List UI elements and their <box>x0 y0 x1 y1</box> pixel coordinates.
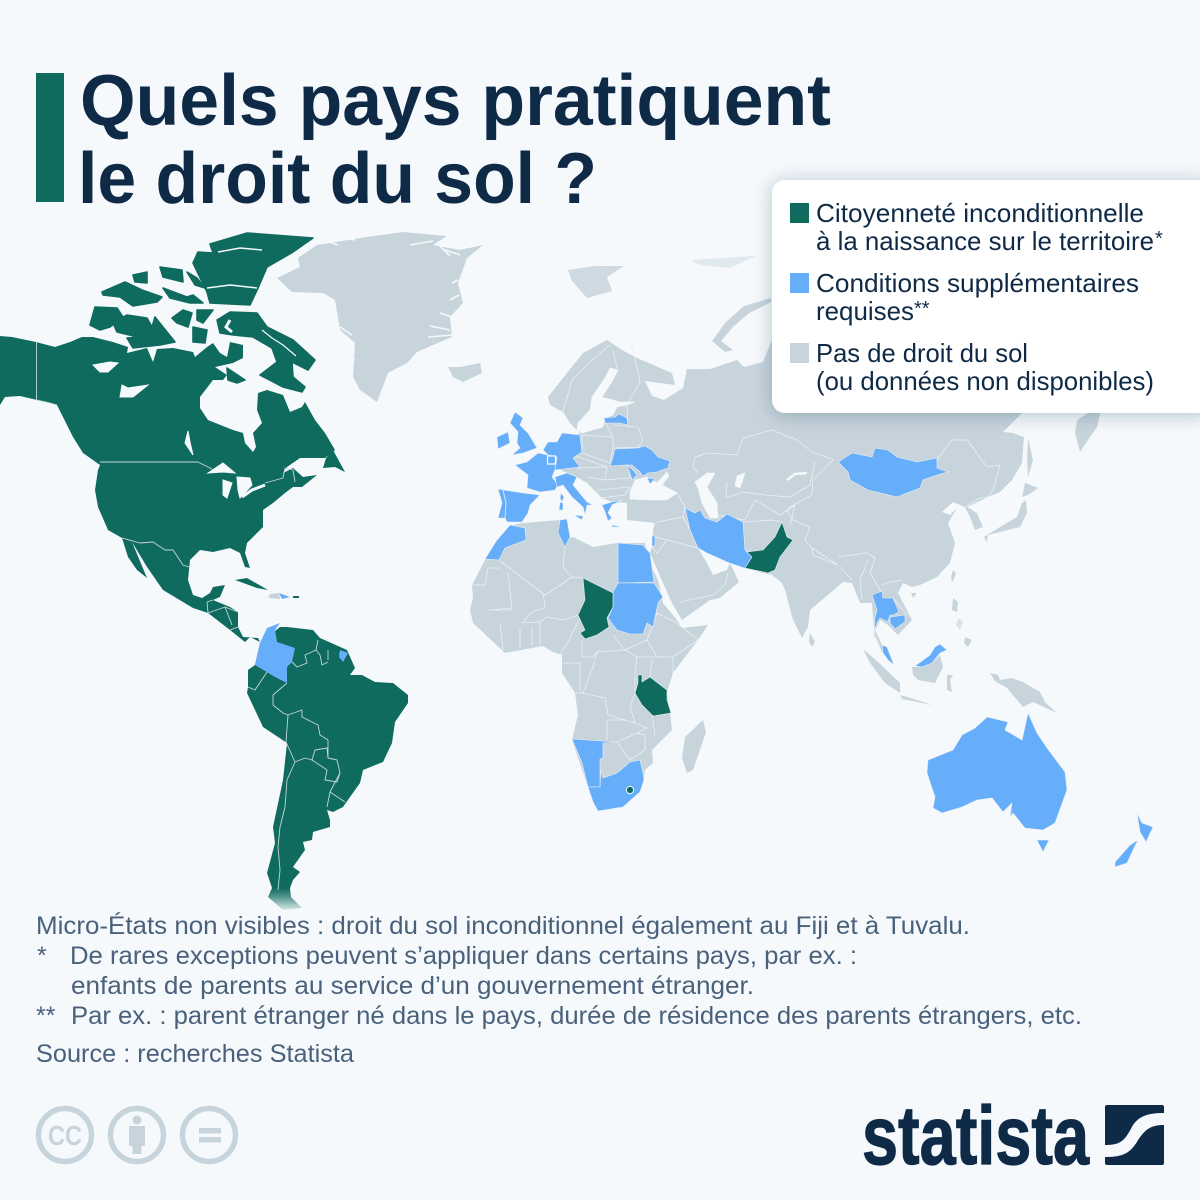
Colombia and French Guiana <box>255 623 348 683</box>
Ireland <box>497 432 510 449</box>
Lesotho <box>626 786 634 794</box>
Mediterranean islands <box>574 515 583 520</box>
inland seas <box>577 368 807 518</box>
Crimea <box>647 478 655 484</box>
legend: unconditional citizenship: * <box>1155 228 1163 250</box>
footnotes <box>36 911 1082 1030</box>
Tanzania <box>635 675 671 716</box>
Malaysia <box>882 645 894 665</box>
Portugal border <box>503 490 506 518</box>
Arctic archipelago <box>90 233 315 392</box>
title: Quels pays pratiquent <box>80 61 831 141</box>
Germany, Netherlands <box>543 433 582 470</box>
footnotes: De rares exceptions peuvent s’appliquer dans certains pays, par ex. : <box>70 942 857 970</box>
United Kingdom <box>510 412 537 455</box>
Statista logo icon <box>1105 1105 1164 1165</box>
world map <box>0 232 1153 910</box>
Israel <box>652 536 655 547</box>
legend: no birthright citizenship: Pas de droit du sol <box>816 338 1028 368</box>
legend: additional conditions <box>790 268 1139 326</box>
Australia <box>927 713 1067 830</box>
footnotes: ** <box>36 1002 56 1030</box>
legend: additional conditions: ** <box>914 298 930 320</box>
South America borders <box>248 640 345 890</box>
New Zealand <box>1137 813 1153 842</box>
legend: additional conditions: Conditions supplémentaires <box>816 268 1139 298</box>
legend panel <box>772 180 1200 413</box>
Asia and Europe coloured countries <box>497 412 1153 867</box>
Caribbean: Hispaniola <box>268 593 290 599</box>
Thailand <box>872 591 899 645</box>
Egypt <box>618 543 654 583</box>
footnotes: * <box>37 942 47 970</box>
Chad <box>578 578 613 639</box>
legend: unconditional citizenship <box>790 198 1163 256</box>
Spain and Portugal <box>498 489 540 522</box>
Italy <box>555 473 593 515</box>
legend: additional conditions: requises <box>816 296 914 326</box>
Greenland fjords <box>330 238 460 360</box>
icon: attribution <box>110 1108 164 1162</box>
footnotes: enfants de parents au service d’un gouvernement étranger. <box>71 972 754 1000</box>
Cambodia <box>890 615 905 629</box>
title accent bar <box>36 73 64 202</box>
icon: creative commons: CC <box>48 1120 82 1151</box>
legend: unconditional citizenship: à la naissance sur le territoire <box>816 226 1154 256</box>
Statista wordmark: statista <box>862 1089 1090 1182</box>
Africa borders <box>472 547 698 760</box>
Moldova <box>627 465 637 480</box>
icon: no derivatives <box>182 1108 236 1162</box>
Pakistan <box>745 522 793 573</box>
legend: unconditional citizenship: Citoyenneté inconditionnelle <box>816 198 1144 228</box>
North America borders <box>36 342 295 630</box>
Mongolia <box>838 448 948 497</box>
footnotes: Par ex. : parent étranger né dans le pays, durée de résidence des parents étrangers, etc. <box>71 1002 1082 1030</box>
footnotes: Micro-États non visibles : droit du sol inconditionnel également au Fiji et à Tuvalu. <box>36 911 970 940</box>
title <box>78 61 831 219</box>
Eurasia borders <box>563 345 1000 615</box>
Greece <box>602 500 622 521</box>
Tasmania <box>1037 840 1049 852</box>
Africa coloured countries <box>485 519 671 811</box>
South America <box>247 627 408 910</box>
Morocco <box>485 525 526 560</box>
source: Source : recherches Statista <box>36 1040 354 1068</box>
Luxembourg outline <box>548 456 556 464</box>
icon: creative commons <box>38 1108 92 1162</box>
Tunisia <box>558 519 570 547</box>
Africa <box>470 520 708 810</box>
North America <box>0 336 345 642</box>
Latvia <box>604 414 628 425</box>
South Africa <box>588 760 644 811</box>
Eurasia <box>548 256 1100 713</box>
Greenland and Iceland <box>277 232 483 402</box>
Namibia <box>572 739 617 787</box>
legend: no birthright citizenship <box>790 338 1154 396</box>
Sudan <box>608 583 663 634</box>
France <box>515 453 558 492</box>
title: le droit du sol ? <box>78 139 597 219</box>
Canadian lakes and Great Lakes <box>93 248 296 498</box>
Iran <box>685 508 752 569</box>
Ukraine <box>610 446 670 476</box>
legend: no birthright citizenship: (ou données non disponibles) <box>816 366 1154 396</box>
